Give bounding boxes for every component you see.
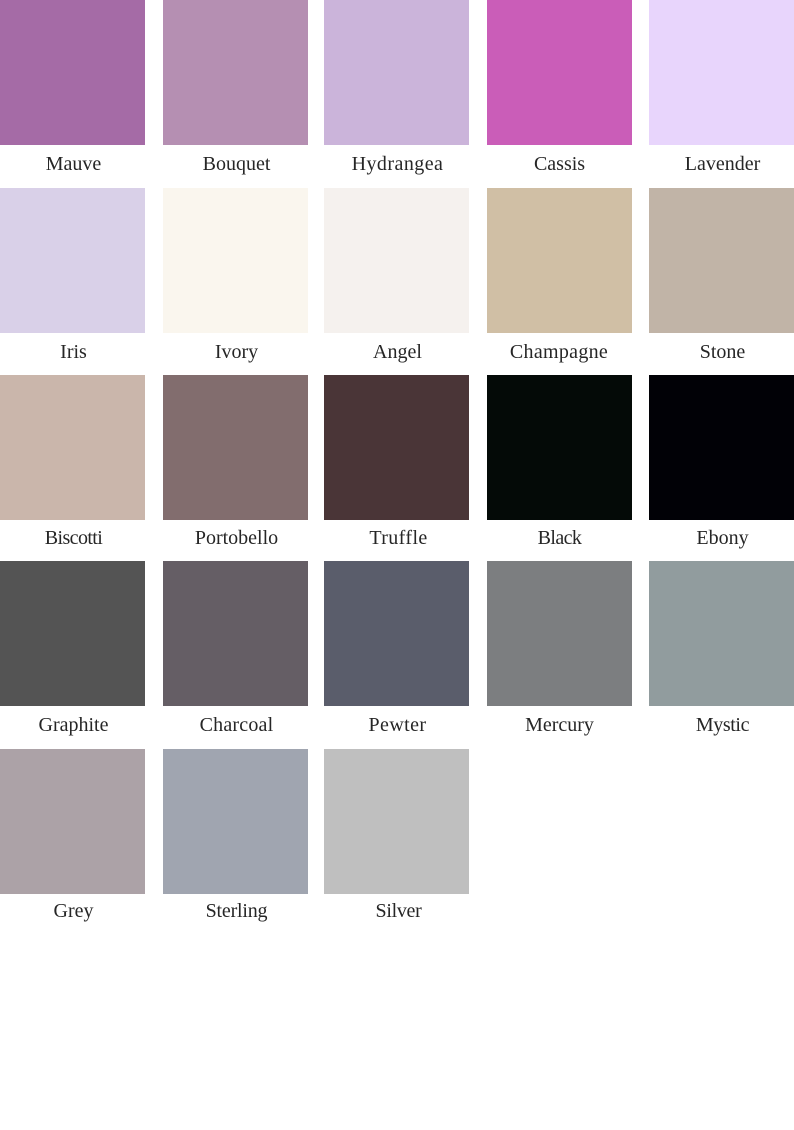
swatch: Hydrangea: [324, 0, 469, 175]
swatch: Cassis: [487, 0, 632, 175]
swatch: Angel: Angel: [373, 341, 422, 363]
swatch: Black: Black: [538, 527, 581, 549]
swatch: Truffle: [324, 375, 469, 549]
swatch: Ivory: [163, 188, 308, 363]
swatch: Portobello: Portobello: [195, 527, 278, 549]
swatch: Truffle: Truffle: [369, 527, 428, 549]
swatch: Stone: Stone: [700, 341, 745, 363]
swatch: Mercury: Mercury: [525, 714, 594, 736]
swatch: Charcoal: Charcoal: [200, 714, 273, 736]
swatch: Graphite: [0, 561, 145, 736]
swatch: Grey: [0, 749, 145, 922]
swatch: Champagne: [487, 188, 632, 363]
swatch: Pewter: [324, 561, 469, 736]
swatch: Bouquet: [163, 0, 308, 175]
swatch: Black: [487, 375, 632, 549]
swatch: Ebony: [649, 375, 794, 549]
swatch: Grey: Grey: [54, 900, 93, 922]
swatch: Pewter: Pewter: [369, 714, 426, 736]
swatch: Iris: [0, 188, 145, 363]
swatch: Angel: [324, 188, 469, 363]
swatch: Graphite: Graphite: [38, 714, 108, 736]
swatch: Mystic: Mystic: [696, 714, 749, 736]
swatch: Sterling: Sterling: [206, 900, 267, 922]
swatch: Biscotti: [0, 375, 145, 549]
swatch: Portobello: [163, 375, 308, 549]
swatch: Sterling: [163, 749, 308, 922]
swatch: Hydrangea: Hydrangea: [352, 153, 443, 175]
swatch: Stone: [649, 188, 794, 363]
swatch: Iris: Iris: [60, 341, 87, 363]
swatch: Cassis: Cassis: [534, 153, 585, 175]
swatch: Ivory: Ivory: [215, 341, 258, 363]
swatch: Mauve: [0, 0, 145, 175]
swatch: Mercury: [487, 561, 632, 736]
swatch: Ebony: Ebony: [696, 527, 749, 549]
swatch: Lavender: [649, 0, 794, 175]
swatch: Champagne: Champagne: [510, 341, 608, 363]
swatch: Lavender: Lavender: [685, 153, 760, 175]
swatch: Silver: [324, 749, 469, 922]
swatch: Bouquet: Bouquet: [203, 153, 270, 175]
swatch: Mauve: Mauve: [46, 153, 101, 175]
swatch: Silver: Silver: [376, 900, 421, 922]
swatch: Mystic: [649, 561, 794, 736]
swatch: Biscotti: Biscotti: [45, 527, 102, 549]
swatch: Charcoal: [163, 561, 308, 736]
